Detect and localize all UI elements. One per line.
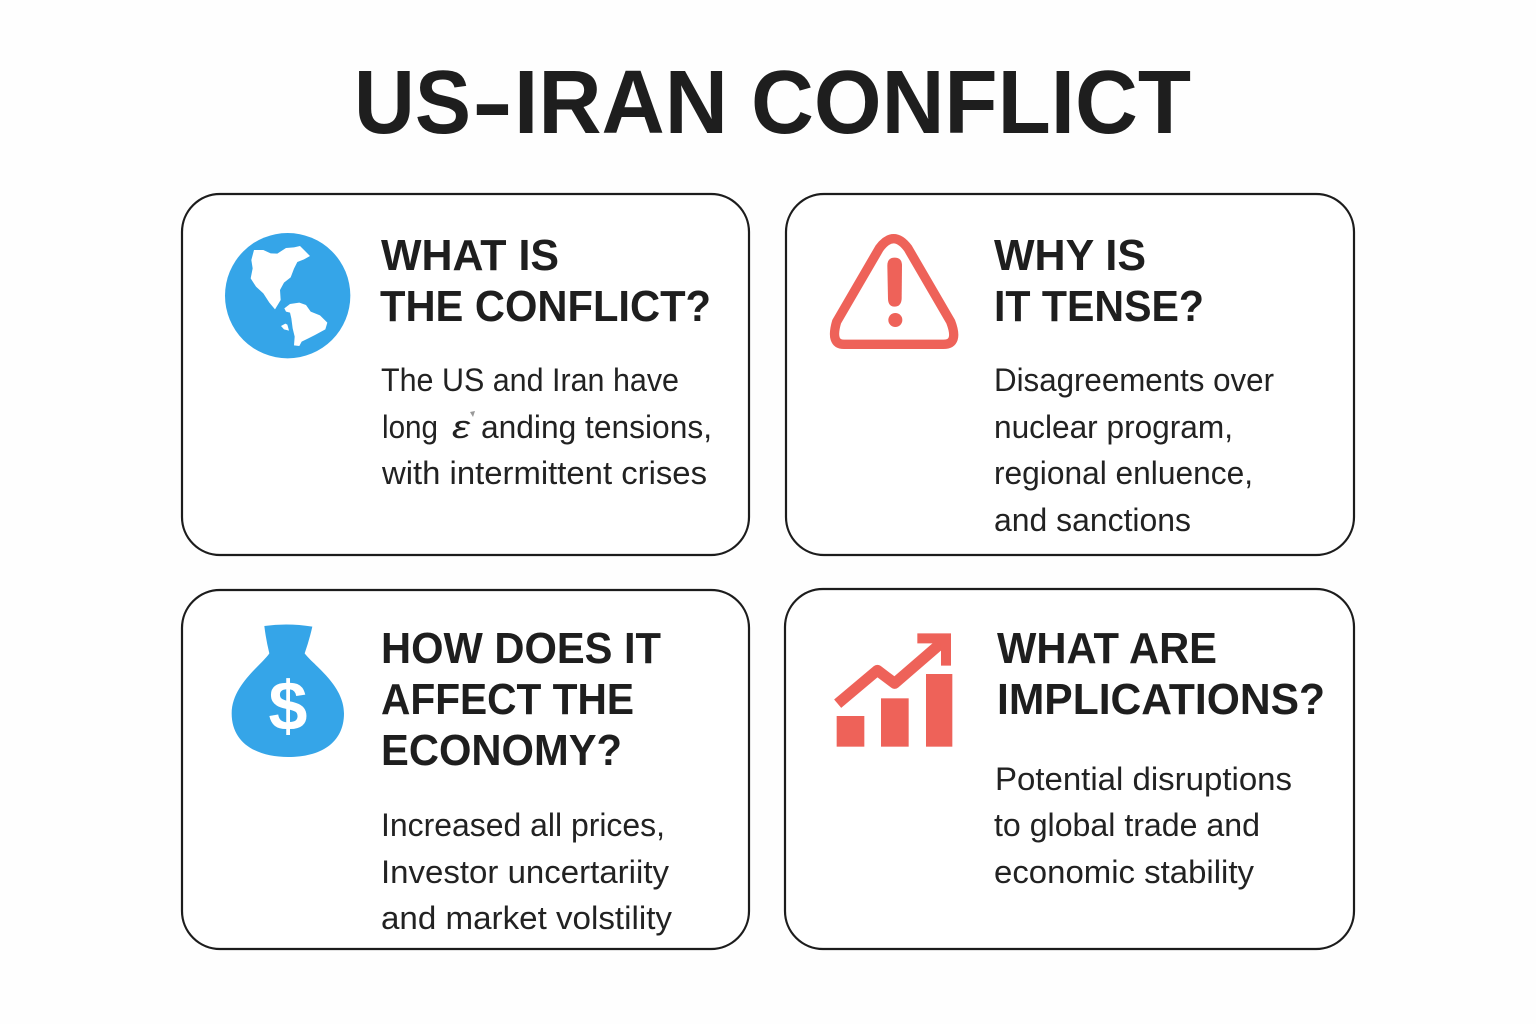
card outline [785,589,1354,949]
body text [994,362,1274,538]
body text: Investor uncertariity [381,854,669,890]
body text: and sanctions [994,502,1191,538]
icon: money bag [232,624,344,757]
panel: what is the conflict [182,194,749,555]
body text: Disagreements over [994,362,1274,398]
icon: globe [225,233,350,358]
heading [381,624,661,775]
heading: HOW DOES IT [381,624,661,673]
heading: WHY IS [994,231,1146,280]
heading [997,624,1325,724]
card outline [182,194,749,555]
title: CONFLICT [751,53,1191,153]
heading: WHAT IS [381,231,559,280]
body text: regional enluence, [994,455,1253,491]
panel: how does it affect the economy [182,590,749,949]
heading: IT TENSE? [994,282,1204,331]
body text: and market volstility [381,900,672,936]
card outline [786,194,1354,555]
heading: THE CONFLICT? [380,282,711,331]
body text [381,362,712,491]
heading [994,231,1204,331]
card outline [182,590,749,949]
title: - [472,53,513,153]
heading: WHAT ARE [997,624,1217,673]
body text: long [382,409,438,445]
body text: anding tensions, [481,409,712,445]
title: US [354,53,471,153]
heading: ECONOMY? [381,726,622,775]
body text: economic stability [994,854,1254,890]
heading: IMPLICATIONS? [997,675,1325,724]
icon: rising bar chart [837,633,952,747]
body text: The US and Iran have [381,362,679,398]
title [354,53,1191,153]
body text: nuclear program, [994,409,1233,445]
body text: ε [452,409,471,445]
heading: AFFECT THE [381,675,634,724]
heading [380,231,711,331]
body text [381,807,672,936]
icon: money bag: $ [269,667,307,745]
panel: what are implications [785,589,1354,949]
body text: to global trade and [994,807,1260,843]
body text [994,761,1292,890]
panel: why is it tense [786,194,1354,555]
icon: warning triangle [835,239,954,344]
body text: Increased all prices, [381,807,665,843]
title: IRAN [514,53,728,153]
body text: with intermittent crises [381,455,707,491]
body text: Potential disruptions [995,761,1292,797]
